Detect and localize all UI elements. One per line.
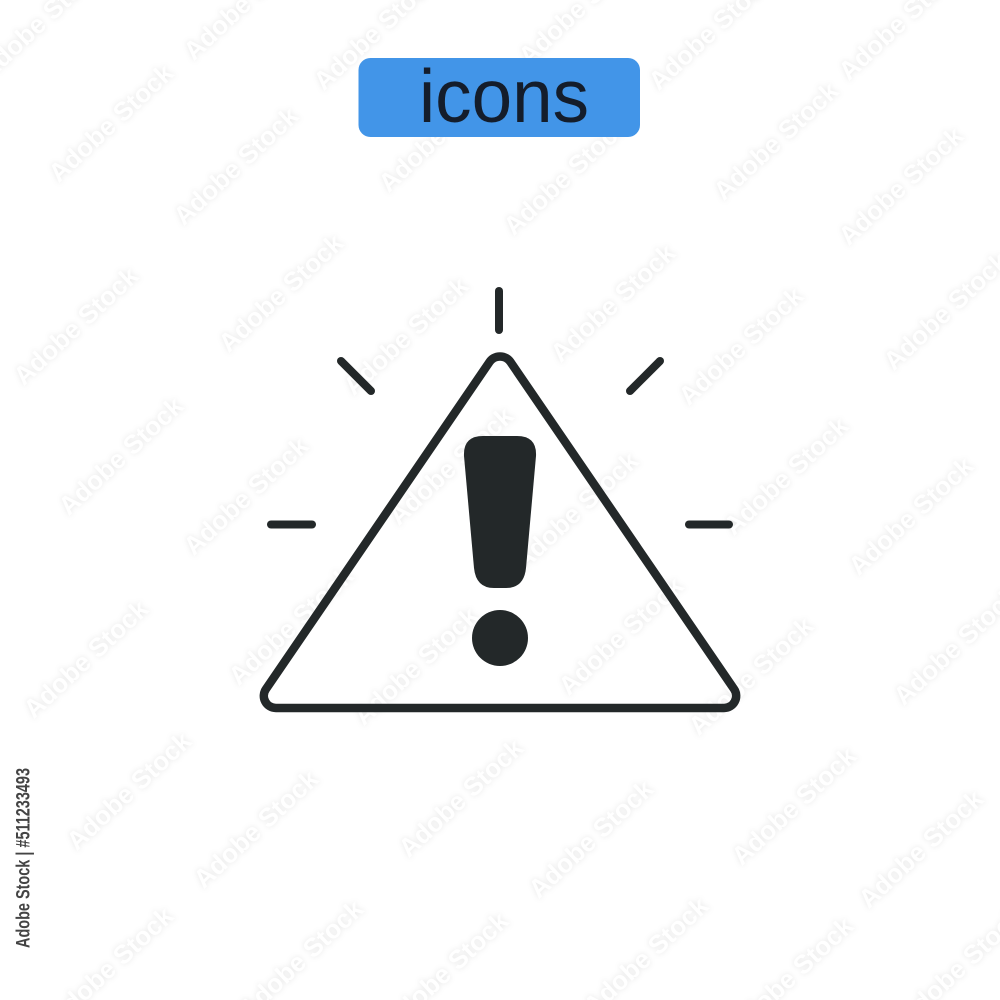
- background watermarks: Adobe Stock: [52, 390, 189, 521]
- background watermarks: Adobe Stock: [544, 237, 681, 368]
- stock id caption: Adobe Stock | #511233493: [14, 768, 34, 948]
- background watermarks: Adobe Stock: [392, 732, 529, 863]
- background watermarks: Adobe Stock: [717, 410, 854, 541]
- background watermarks: Adobe Stock: [187, 763, 324, 894]
- background watermarks: Adobe Stock: [707, 75, 844, 206]
- background watermarks: Adobe Stock: [507, 445, 644, 576]
- title badge: icons: [358, 54, 640, 138]
- background watermarks: Adobe Stock: [212, 227, 349, 358]
- icon: warning triangle with exclamation mark and rays: [264, 291, 736, 708]
- rays: [271, 291, 729, 524]
- exclamation mark dot: [472, 610, 528, 666]
- background watermarks: Adobe Stock: [42, 57, 179, 188]
- background watermarks: Adobe Stock: [552, 570, 689, 701]
- background watermarks: Adobe Stock: [372, 67, 509, 198]
- background watermarks: Adobe Stock: [222, 560, 359, 691]
- background watermarks: Adobe Stock: [167, 100, 304, 231]
- background watermarks: Adobe Stock: [17, 593, 154, 724]
- exclamation mark bar: [464, 436, 536, 588]
- background watermarks: Adobe Stock: [842, 450, 979, 581]
- background watermarks: Adobe Stock: [725, 740, 862, 871]
- background watermarks: Adobe Stock: [7, 260, 144, 391]
- background watermarks: Adobe Stock: [177, 430, 314, 561]
- background watermarks: Adobe Stock: [337, 270, 474, 401]
- triangle outline: [264, 356, 736, 708]
- background watermarks: Adobe Stock: [682, 610, 819, 741]
- background watermarks: Adobe Stock: [347, 600, 484, 731]
- title badge: icons: icons: [419, 54, 589, 138]
- background watermarks: Adobe Stock: [832, 120, 969, 251]
- background watermarks: Adobe Stock: [382, 400, 519, 531]
- background watermarks: Adobe Stock: [497, 110, 634, 241]
- background watermarks: Adobe Stock: [672, 280, 809, 411]
- background watermarks: Adobe Stock: [522, 773, 659, 904]
- background watermarks: Adobe Stock: [852, 783, 989, 914]
- background watermarks: Adobe Stock: [60, 725, 197, 856]
